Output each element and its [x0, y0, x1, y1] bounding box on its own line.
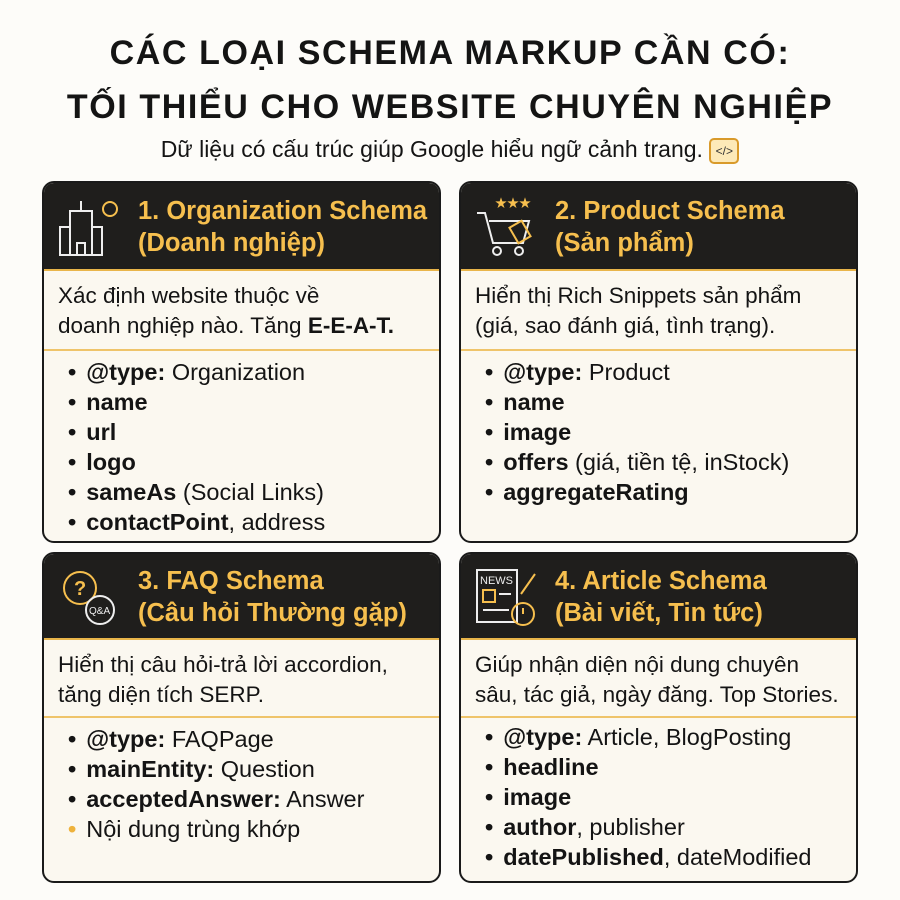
bullet list: image — [503, 419, 571, 445]
icon: building — [59, 201, 118, 256]
title — [67, 33, 833, 126]
description — [58, 652, 388, 707]
description — [475, 283, 801, 338]
bullet list: headline — [503, 754, 599, 780]
description: Hiển thị Rich Snippets sản phẩm — [475, 283, 801, 308]
header: product: (Sản phẩm) — [555, 229, 694, 257]
bullet list: @type: FAQPage — [86, 726, 274, 752]
icon: cart — [477, 196, 532, 256]
bullet list: name — [503, 389, 565, 415]
description — [475, 652, 839, 707]
bullet list: offers (giá, tiền tệ, inStock) — [503, 449, 789, 475]
subtitle: Dữ liệu có cấu trúc giúp Google hiểu ngữ cảnh trang. — [161, 136, 703, 162]
header: organization: (Doanh nghiệp) — [138, 229, 325, 257]
header: organization: 1. Organization Schema — [138, 197, 427, 225]
title: CÁC LOẠI SCHEMA MARKUP CẦN CÓ: — [110, 34, 790, 72]
icon: cart: ★★★ — [495, 196, 531, 210]
bullet list: logo — [86, 449, 136, 475]
icon: faq bubbles: ? — [74, 578, 86, 600]
bullet list: @type: Product — [503, 359, 670, 385]
bullet list: author, publisher — [503, 814, 685, 840]
icon: news — [476, 569, 536, 626]
panel: organization — [42, 181, 441, 543]
header: article: 4. Article Schema — [555, 567, 767, 595]
description — [58, 283, 394, 338]
bullet list: image — [503, 784, 571, 810]
icon: faq bubbles — [63, 571, 115, 625]
description: doanh nghiệp nào. Tăng E-E-A-T. — [58, 313, 394, 338]
description: (giá, sao đánh giá, tình trạng). — [475, 313, 775, 338]
bullet list: contactPoint, address — [86, 509, 325, 535]
bullet list — [486, 359, 789, 505]
description: Xác định website thuộc về — [58, 283, 319, 308]
title: TỐI THIỂU CHO WEBSITE CHUYÊN NGHIỆP — [67, 88, 833, 126]
description: Hiển thị câu hỏi-trả lời accordion, — [58, 652, 388, 677]
bullet list: sameAs (Social Links) — [86, 479, 324, 505]
header: faq: (Câu hỏi Thường gặp) — [138, 599, 407, 627]
bullet list: datePublished, dateModified — [503, 844, 811, 870]
icon: faq bubbles: Q&A — [89, 606, 110, 617]
panel: article — [459, 552, 858, 883]
bullet list: name — [86, 389, 148, 415]
bullet list — [68, 726, 364, 842]
bullet list: acceptedAnswer: Answer — [86, 786, 364, 812]
panel: faq — [42, 552, 441, 883]
header: article — [461, 554, 856, 640]
header: organization — [44, 183, 439, 271]
header: product — [461, 183, 856, 271]
header: article: (Bài viết, Tin tức) — [555, 599, 763, 627]
bullet list: url — [86, 419, 116, 445]
panel: product — [459, 181, 858, 543]
bullet list: @type: Article, BlogPosting — [503, 724, 791, 750]
bullet list — [68, 359, 325, 535]
bullet list: mainEntity: Question — [86, 756, 315, 782]
bullet list: Nội dung trùng khớp — [86, 816, 300, 842]
header: product: 2. Product Schema — [555, 197, 785, 225]
bullet list — [486, 724, 811, 870]
description: Giúp nhận diện nội dung chuyên — [475, 652, 799, 677]
description: sâu, tác giả, ngày đăng. Top Stories. — [475, 682, 839, 707]
header: faq: 3. FAQ Schema — [138, 567, 324, 595]
subtitle: </> — [716, 144, 733, 158]
icon: news: NEWS — [480, 575, 513, 587]
bullet list: aggregateRating — [503, 479, 689, 505]
header: faq — [44, 554, 439, 640]
bullet list: @type: Organization — [86, 359, 305, 385]
description: tăng diện tích SERP. — [58, 682, 264, 707]
